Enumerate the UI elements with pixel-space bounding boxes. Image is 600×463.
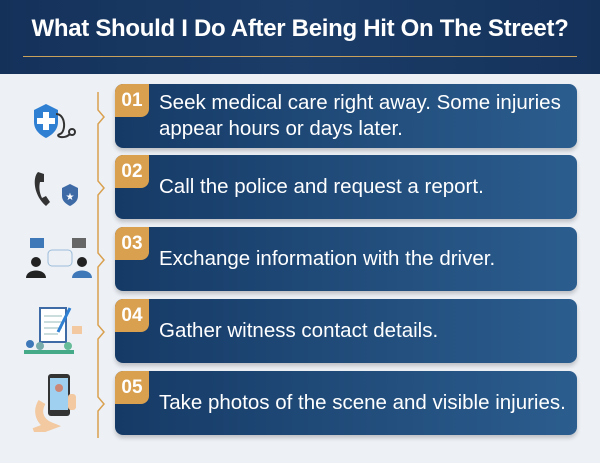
card 04	[115, 299, 577, 363]
card 03: Exchange information with the driver.	[159, 247, 495, 270]
card 03: 03	[121, 233, 143, 254]
card 01: Seek medical care right away. Some injuries appear hours or days later.	[159, 91, 561, 140]
card 04: Gather witness contact details.	[159, 319, 438, 342]
card 02	[115, 155, 577, 219]
icon: witness notes	[24, 307, 82, 354]
card 03	[115, 227, 577, 291]
card 02: Call the police and request a report.	[159, 175, 484, 198]
icon: medical shield	[34, 104, 76, 138]
icon: phone and badge	[34, 172, 78, 206]
card 05	[115, 371, 577, 435]
card 05: Take photos of the scene and visible injuries.	[159, 391, 566, 414]
card 01	[115, 84, 577, 148]
header	[0, 0, 600, 74]
icon: phone photo	[32, 374, 76, 432]
icon: exchange info	[26, 238, 92, 278]
title: What Should I Do After Being Hit On The Street?	[32, 15, 568, 42]
card 04: 04	[121, 305, 143, 326]
card 01: 01	[121, 90, 143, 111]
card 05: 05	[121, 377, 143, 398]
card 02: 02	[121, 161, 143, 182]
icon: phone and badge: ★	[66, 192, 75, 203]
